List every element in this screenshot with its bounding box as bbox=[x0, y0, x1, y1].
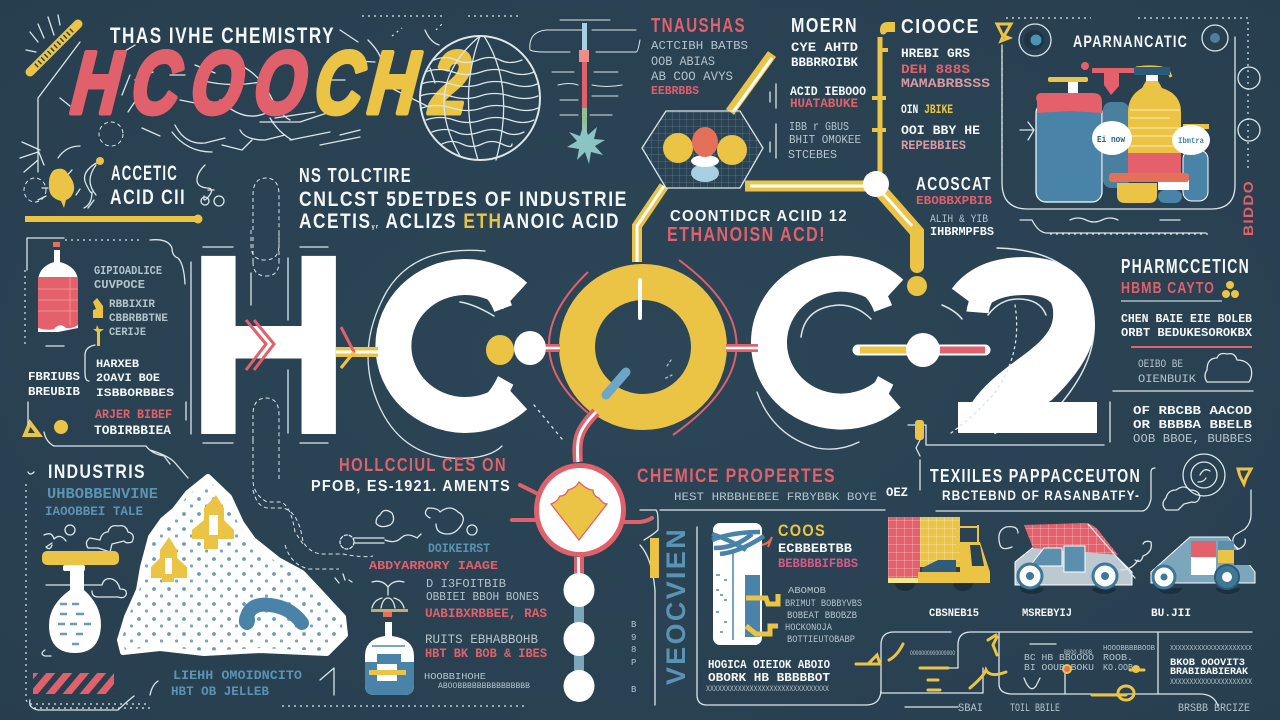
block: lab notes: ABDYARRORY IAAGE bbox=[369, 559, 498, 573]
diagram: circuit schematic: TOIL BBILE bbox=[1010, 703, 1060, 715]
vehicle labels: BU.JII bbox=[1151, 608, 1191, 620]
icon: car with red roof bbox=[999, 523, 1151, 594]
panel: ingredients tube: HOCKONOJA bbox=[785, 623, 832, 634]
block: cioocе column: MAMABRBSSS bbox=[901, 76, 990, 91]
letter O body ring bbox=[577, 282, 709, 412]
block: left bottle and notes: BREUBIB bbox=[28, 385, 80, 399]
block: lab notes: HOOBBIHOHE bbox=[424, 672, 486, 682]
block: industris: IAOOBBEI TALE bbox=[45, 504, 143, 519]
block: molecule caption: HOLLCCIUL CES ON bbox=[339, 455, 507, 475]
diagram: circuit schematic: BRSBB BRCIZE bbox=[1178, 703, 1250, 715]
heading: panel title: APARNANCATIC bbox=[1073, 32, 1188, 51]
block: left bottle and notes: 2OAVI BOE bbox=[96, 373, 160, 385]
small left note column bbox=[631, 620, 637, 695]
block: chemical properties heading: HEST HRBBHEBEE FRBYBBK BOYE bbox=[674, 492, 877, 504]
icon: dark ring right bbox=[1202, 25, 1228, 51]
icon: molecule in hexagon bbox=[642, 111, 763, 188]
block: left bottle and notes: HARXEB bbox=[96, 359, 139, 371]
yellow label strip bbox=[650, 538, 659, 578]
block: left bottle and notes: RBBIXIR bbox=[109, 299, 155, 311]
icon: tower small bbox=[151, 537, 187, 582]
block: left bottle and notes: GIPIOADLICE bbox=[94, 264, 162, 278]
letter 2 body stroke bbox=[958, 276, 1097, 433]
block: modern column: ACID IEBOOO bbox=[790, 84, 866, 99]
block: chemical properties heading: OEZ bbox=[886, 485, 908, 500]
panel: ingredients tube: HOGICA OIEIOK ABOIO bbox=[708, 658, 830, 672]
title: script HCOOCH2: CH2 bbox=[311, 33, 474, 132]
heading: chemistry kicker: THAS IVHE CHEMISTRY bbox=[110, 23, 335, 48]
block: acoscat: ALIH & YIB bbox=[930, 214, 988, 226]
small left note column: B bbox=[631, 620, 637, 630]
panel: ingredients tube: ECBBEBTBB bbox=[778, 541, 852, 556]
block: left bottle and notes: FBRIUBS bbox=[28, 370, 80, 384]
block: pharmaceutical notes: OOB BBOE, BUBBES bbox=[1133, 432, 1252, 446]
diagram: circuit schematic: XXXXXXXXXXXXXXXXXXXXX bbox=[1170, 645, 1253, 653]
connector: yellow pipework bbox=[637, 37, 917, 266]
block: thaushas column: TNAUSHAS bbox=[651, 15, 746, 37]
small left note column: 8 bbox=[631, 645, 636, 655]
block: thaushas column bbox=[651, 15, 748, 98]
icon: nozzle bbox=[1081, 62, 1171, 95]
icon: label circle left bbox=[1092, 121, 1132, 155]
icon: top right seal and cloud bbox=[1163, 454, 1251, 549]
icon: truck bbox=[888, 517, 990, 591]
block: pharmaceutical notes: CHEN BAIE EIE BOLEB bbox=[1121, 312, 1252, 326]
letter C body ring bbox=[769, 274, 891, 412]
icon: cups front bbox=[1109, 173, 1189, 203]
block: thaushas column: EEBRBBS bbox=[651, 84, 699, 98]
panel: ingredients tube bbox=[640, 510, 885, 705]
block: acoscat: ACOSCAT bbox=[916, 174, 992, 194]
icon: vertical node chain bbox=[564, 557, 594, 702]
icon: yellow triangle marker bbox=[997, 24, 1011, 41]
block: industrial intro text: ACETISᵧᵣ ACLIZS ETHANOIC ACID bbox=[299, 210, 620, 233]
yellow components bbox=[856, 635, 1144, 695]
panel: apothecary bottles bbox=[997, 18, 1260, 236]
block: industris bbox=[26, 462, 158, 710]
block: cioocе column: OIN JBIKE bbox=[901, 102, 953, 117]
diagram: circuit schematic: BRABIBABIERAK bbox=[1170, 667, 1248, 678]
panel: ingredients tube: BEBBBBIFBBS bbox=[778, 556, 858, 571]
letter H: H bbox=[187, 202, 350, 488]
block: acoscat: IHBRMPFBS bbox=[930, 225, 994, 239]
diagram: circuit schematic: OOOOOOOOOOOOOOOO bbox=[910, 650, 955, 657]
big word: HCOC2 bbox=[187, 202, 1253, 544]
diagram: circuit schematic: BBOO BOOB bbox=[1064, 649, 1092, 656]
block: industrial intro text bbox=[299, 165, 628, 233]
block: left bottle and notes: ISBBORBBES bbox=[96, 388, 174, 400]
title: script HCOOCH2: HCOO bbox=[68, 33, 312, 132]
block: left bottle and notes: CUVPOCE bbox=[94, 278, 145, 292]
icon: dark ring left bbox=[1019, 24, 1051, 56]
icon: three dots bbox=[1222, 281, 1239, 298]
icon: cloud bbox=[1205, 354, 1252, 382]
icon: label circle left: Ei now bbox=[1097, 135, 1126, 145]
block: conditioner acid: ETHANOISN ACD! bbox=[667, 224, 826, 246]
block: left bottle and notes: CBBRBBTNE bbox=[109, 313, 168, 325]
block: cioocе column: DEH 888S bbox=[901, 62, 970, 77]
block: left bottle and notes: ARJER BIBEF bbox=[95, 407, 172, 422]
block: modern column: STCEBES bbox=[788, 148, 837, 162]
block: modern column: HUATABUKE bbox=[790, 96, 858, 111]
block: left bottle and notes: CERIJE bbox=[109, 327, 146, 339]
panel: ingredients tube: ABOMOB bbox=[788, 586, 827, 596]
panel: ingredients tube: BOBEAT BBOBZB bbox=[787, 611, 857, 622]
block: modern column: BBBRROIBK bbox=[791, 55, 858, 70]
block: acetic acid: ACCETIC bbox=[111, 162, 178, 185]
block: conditioner acid: COONTIDCR ACIID 12 bbox=[670, 208, 848, 225]
block: modern column bbox=[770, 15, 866, 162]
block: textiles heading: RBCTEBND OF RASANBATFY- bbox=[942, 487, 1140, 503]
icon: triangle and dot bbox=[25, 420, 68, 435]
panel: ingredients tube: XXXXXXXXXXXXXXXXXXXXXXXXXXXXXXX bbox=[706, 685, 829, 694]
letter 2: 2 bbox=[953, 225, 1091, 477]
block: molecule caption: PFOB, ES-1921. AMENTS bbox=[311, 478, 511, 495]
block: acetic acid: ACID CII bbox=[110, 186, 186, 209]
icon: yellow hatched tube bbox=[30, 24, 78, 72]
vehicle labels: CBSNEB15 bbox=[929, 608, 979, 620]
letter C: C bbox=[376, 221, 521, 470]
letter C: C bbox=[756, 221, 901, 470]
block: pharmaceutical notes: OF RBCBB AACOD bbox=[1133, 404, 1252, 418]
frame lines behind letters bbox=[191, 230, 1253, 544]
block: cioocе column: CIOOCE bbox=[901, 16, 980, 38]
block: hatch and footer note bbox=[30, 668, 528, 706]
block: hatch and footer note: HBT OB JELLEB bbox=[171, 684, 269, 699]
diagram: circuit schematic: KO.OOB bbox=[1103, 663, 1134, 673]
icon: red medallion with diamond bbox=[512, 412, 652, 557]
block: cioocе column: OOI BBY HE bbox=[901, 123, 980, 138]
diagram: circuit schematic: ROOB. bbox=[1103, 653, 1133, 663]
small left note column: B bbox=[631, 685, 637, 695]
icon: side badges bbox=[1238, 67, 1260, 141]
icon: yellow pegs bbox=[93, 298, 104, 346]
block: cioocе column bbox=[880, 16, 990, 153]
icon: yellow bottle bbox=[1128, 67, 1181, 173]
icon: dotted mountain with towers bbox=[120, 477, 345, 653]
icon: label circle right: Ibmtra bbox=[1178, 137, 1204, 146]
block: pharmaceutical notes: OIENBUIK bbox=[1138, 374, 1196, 386]
rotated red text: BIDDO bbox=[1240, 180, 1256, 236]
block: pharmaceutical notes: ORBT BEDUKESOROKBX bbox=[1121, 326, 1253, 340]
block: lab notes: UABIBXRBBEE, RAS bbox=[425, 606, 547, 621]
icon: small right bottle bbox=[1183, 124, 1209, 201]
icon: flask bbox=[42, 551, 119, 653]
icon: car with colour blocks bbox=[1151, 537, 1255, 594]
block: textiles heading bbox=[930, 466, 1155, 511]
block: lab notes: RUITS EBHABBOHB bbox=[425, 632, 538, 647]
decorative line art: top left bbox=[20, 15, 518, 276]
block: chemical properties heading: CHEMICE PROPERTES bbox=[637, 466, 836, 487]
block: cioocе column: REPEBBIES bbox=[901, 138, 966, 153]
diagram: circuit schematic: XXXXXXXXXXXXXXXXXXXXX bbox=[1170, 678, 1252, 687]
diagram: circuit schematic: BC HB BBOOOO bbox=[1024, 653, 1094, 663]
small left note column: 9 bbox=[631, 633, 636, 643]
block: modern column: BHIT OMOKEE bbox=[789, 133, 861, 147]
block: pharmaceutical notes: OR BBBBA BBELB bbox=[1133, 418, 1252, 432]
block: acetic acid bbox=[25, 157, 198, 219]
block: lab notes: OBBIEI BBOH BONES bbox=[426, 590, 539, 604]
block: pharmaceutical notes: HBMB CAYTO bbox=[1121, 280, 1215, 297]
block: industrial intro text: CNLCST 5DETDES OF INDUSTRIE bbox=[299, 188, 628, 211]
block: modern column: IBB r GBUS bbox=[789, 120, 849, 134]
icon: yellow splash bbox=[49, 169, 74, 208]
vehicle labels bbox=[929, 608, 1191, 620]
block: textiles heading: TEXIILES PAPPACCEUTON bbox=[930, 466, 1141, 486]
icon: fountain bottle bbox=[365, 581, 414, 695]
panel: ingredients tube: BOTTIEUTOBABP bbox=[787, 635, 855, 646]
letter C body ring bbox=[393, 277, 515, 415]
block: modern column: CYE AHTD bbox=[791, 40, 858, 55]
panel: ingredients tube: BRIMUT BOBBYVBS bbox=[785, 599, 862, 610]
icon: blue curl bbox=[246, 605, 302, 623]
block: conditioner acid bbox=[667, 208, 848, 246]
diagram: circuit schematic bbox=[856, 632, 1253, 715]
block: left bottle and notes bbox=[25, 238, 188, 478]
block: lab notes bbox=[369, 541, 547, 691]
block: thaushas column: ACTCIBH BATBS bbox=[651, 39, 748, 53]
diagram: circuit schematic: BKOB OOOVIT3 bbox=[1170, 658, 1245, 669]
block: hatch and footer note: LIEHH OMOIDNCITO bbox=[173, 668, 302, 683]
letter O: O bbox=[557, 226, 724, 467]
block: modern column: MOERN bbox=[791, 15, 858, 37]
block: molecule caption bbox=[311, 455, 511, 495]
block: lab notes: ABOOBBBBBBBBBBBBBBB bbox=[438, 682, 530, 691]
rotated blue word: VEOCVIEN bbox=[661, 527, 691, 685]
icon: thermometer probe bbox=[530, 20, 640, 164]
icon: red bottle bbox=[38, 242, 78, 332]
block: thaushas column: AB COO AVYS bbox=[651, 69, 733, 84]
icon: big jar bbox=[1036, 77, 1102, 202]
panel: ingredients tube: COOS bbox=[778, 521, 826, 540]
block: industris: UHBOBBENVINE bbox=[47, 486, 158, 503]
icon: label circle right bbox=[1172, 125, 1210, 155]
diagram: circuit schematic: HOOOBBBBBOOB bbox=[1103, 645, 1155, 653]
block: left bottle and notes: TOBIRBBIEA bbox=[94, 423, 171, 438]
icon: blue bottle behind bbox=[1103, 102, 1129, 188]
block: thaushas column: OOB ABIAS bbox=[651, 54, 715, 69]
vehicle labels: MSREBYIJ bbox=[1022, 608, 1072, 620]
yellow rule bbox=[25, 216, 198, 222]
block: chemical properties heading bbox=[637, 460, 920, 504]
decorations over big letters bbox=[246, 276, 1046, 456]
icon: white tube bbox=[712, 523, 778, 645]
block: pharmaceutical notes: OEIBO BE bbox=[1138, 359, 1183, 371]
block: acoscat: EBOBBXPBIB bbox=[916, 194, 992, 208]
line art: dashed tube and clouds bbox=[253, 490, 477, 583]
block: industrial intro text: NS TOLCTIRE bbox=[299, 165, 412, 187]
block: industris: INDUSTRIS bbox=[48, 462, 146, 483]
icon: wire globe bbox=[420, 36, 540, 160]
small left note column: P bbox=[631, 658, 636, 668]
block: cioocе column: HREBI GRS bbox=[901, 46, 970, 61]
icon: tower large bbox=[192, 495, 234, 549]
block: lab notes: HBT BK BOB & IBES bbox=[425, 646, 547, 661]
diagram: circuit schematic: BI OOUB BOKU bbox=[1024, 663, 1094, 673]
block: lab notes: D I3FOITBIB bbox=[426, 577, 506, 591]
block: pharmaceutical notes bbox=[1121, 256, 1253, 446]
block: lab notes: DOIKEIRST bbox=[428, 541, 490, 556]
diagram: circuit schematic: SBAI bbox=[958, 703, 983, 715]
block: acoscat bbox=[916, 174, 994, 239]
panel: ingredients tube: OBORK HB BBBBBOT bbox=[708, 671, 830, 685]
